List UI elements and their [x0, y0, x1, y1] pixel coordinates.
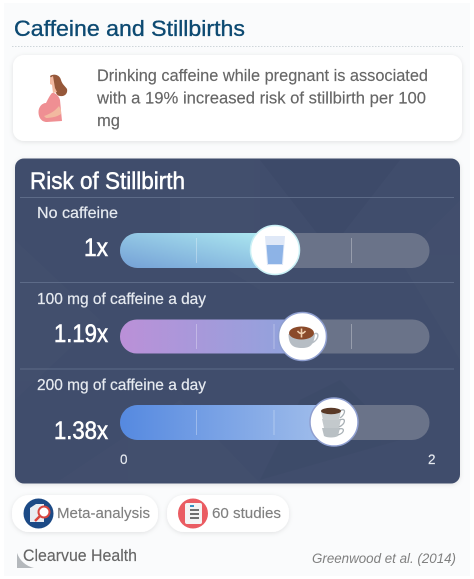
row: 200 mg: 200 mg of caffeine a day — [37, 377, 206, 394]
axis labels: 0 — [120, 452, 128, 467]
summary text — [96, 67, 428, 130]
pill: 60 studies: 60 studies — [212, 505, 281, 522]
row: 200 mg — [37, 377, 430, 446]
summary text: with a 19% increased risk of stillbirth per 100 — [96, 90, 426, 108]
row: 100 mg — [37, 291, 430, 360]
row: no caffeine — [37, 205, 430, 274]
pill: 60 studies — [167, 495, 289, 532]
row: 100 mg: 100 mg of caffeine a day — [37, 291, 206, 308]
pill: meta-analysis — [12, 495, 158, 532]
title: Caffeine and Stillbirths — [14, 16, 245, 41]
bar: 1.19x — [120, 320, 430, 354]
bar: 1x — [120, 233, 430, 268]
axis labels — [120, 452, 436, 467]
icon: magnifier on document — [24, 498, 54, 528]
row: 100 mg: 1.19x — [54, 320, 108, 348]
summary text: Drinking caffeine while pregnant is associated — [97, 67, 428, 85]
bar: 1.38x — [120, 405, 430, 440]
heading: Risk of Stillbirth — [30, 168, 185, 195]
summary text: mg — [97, 112, 120, 130]
citation: Greenwood et al. (2014) — [312, 551, 456, 566]
row: no caffeine: 1x — [84, 234, 108, 262]
panel: summary card — [13, 55, 462, 141]
logo: Clearvue Health: Clearvue Health — [23, 547, 137, 565]
icon: pregnant woman — [38, 75, 67, 122]
icon: glass of water — [250, 226, 300, 274]
panel: risk of stillbirth — [15, 158, 460, 484]
icon: document list — [178, 498, 208, 528]
icon: latte cup — [278, 312, 326, 360]
pill: meta-analysis: Meta-analysis — [57, 505, 150, 522]
icon: stacked cups — [310, 398, 358, 446]
row: no caffeine: No caffeine — [37, 205, 118, 222]
row: 200 mg: 1.38x — [54, 417, 108, 445]
axis labels: 2 — [428, 452, 436, 467]
